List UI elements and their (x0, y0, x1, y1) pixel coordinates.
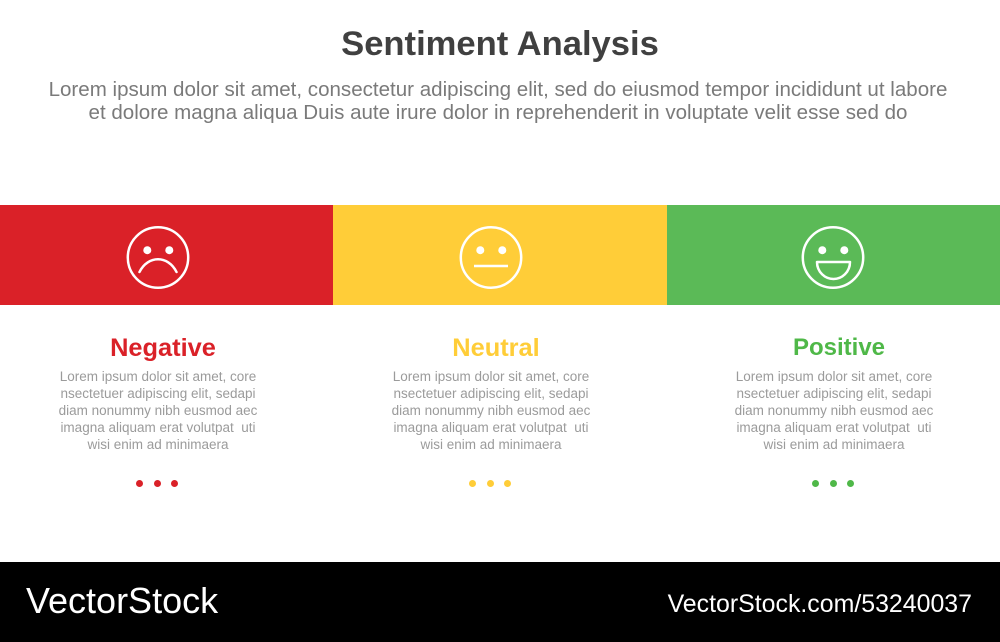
intro text: Lorem ipsum dolor sit amet, consectetur adipiscing elit, sed do eiusmod tempor incididunt ut labore (49, 78, 947, 101)
body text: positive: wisi enim ad minimaera (763, 437, 905, 452)
body text: positive (735, 369, 933, 452)
body text: neutral: Lorem ipsum dolor sit amet, core (393, 369, 589, 384)
panel: neutral band (333, 205, 667, 305)
body text: neutral (392, 369, 590, 452)
body text: positive: imagna aliquam erat volutpat uti (736, 420, 932, 435)
icon: sad face (126, 226, 190, 289)
body text: neutral: nsectetuer adipiscing elit, sedapi (393, 386, 589, 401)
intro text (49, 78, 947, 124)
dots: negative (136, 480, 178, 487)
heading: neutral: Neutral (452, 334, 540, 362)
body text: negative: imagna aliquam erat volutpat uti (60, 420, 256, 435)
heading: positive: Positive (793, 334, 885, 361)
body text: neutral: imagna aliquam erat volutpat uti (393, 420, 589, 435)
body text: negative (59, 369, 257, 452)
footer logo text: VectorStock (26, 580, 218, 621)
panel: negative band (0, 205, 333, 305)
footer bar (0, 562, 1000, 642)
intro text: et dolore magna aliqua Duis aute irure dolor in reprehenderit in voluptate velit esse sed do (89, 100, 907, 124)
panel: negative text (59, 334, 257, 487)
body text: positive: Lorem ipsum dolor sit amet, core (736, 369, 932, 384)
body text: negative: wisi enim ad minimaera (87, 437, 229, 452)
title: Sentiment Analysis (341, 25, 659, 63)
panel: neutral text (392, 334, 590, 487)
icon: happy face (802, 226, 864, 289)
body text: neutral: wisi enim ad minimaera (420, 437, 562, 452)
panel: positive band (667, 205, 1000, 305)
heading: negative: Negative (110, 334, 216, 362)
body text: negative: nsectetuer adipiscing elit, sedapi (60, 386, 256, 401)
body text: positive: diam nonummy nibh eusmod aec (735, 403, 933, 418)
body text: negative: diam nonummy nibh eusmod aec (59, 403, 257, 418)
body text: negative: Lorem ipsum dolor sit amet, core (60, 369, 256, 384)
panel: positive text (735, 334, 933, 487)
dots: positive (812, 480, 854, 487)
body text: positive: nsectetuer adipiscing elit, sedapi (736, 386, 932, 401)
icon: neutral face (460, 226, 522, 289)
footer url: VectorStock.com/53240037 (668, 590, 972, 618)
body text: neutral: diam nonummy nibh eusmod aec (392, 403, 590, 418)
dots: neutral (469, 480, 511, 487)
